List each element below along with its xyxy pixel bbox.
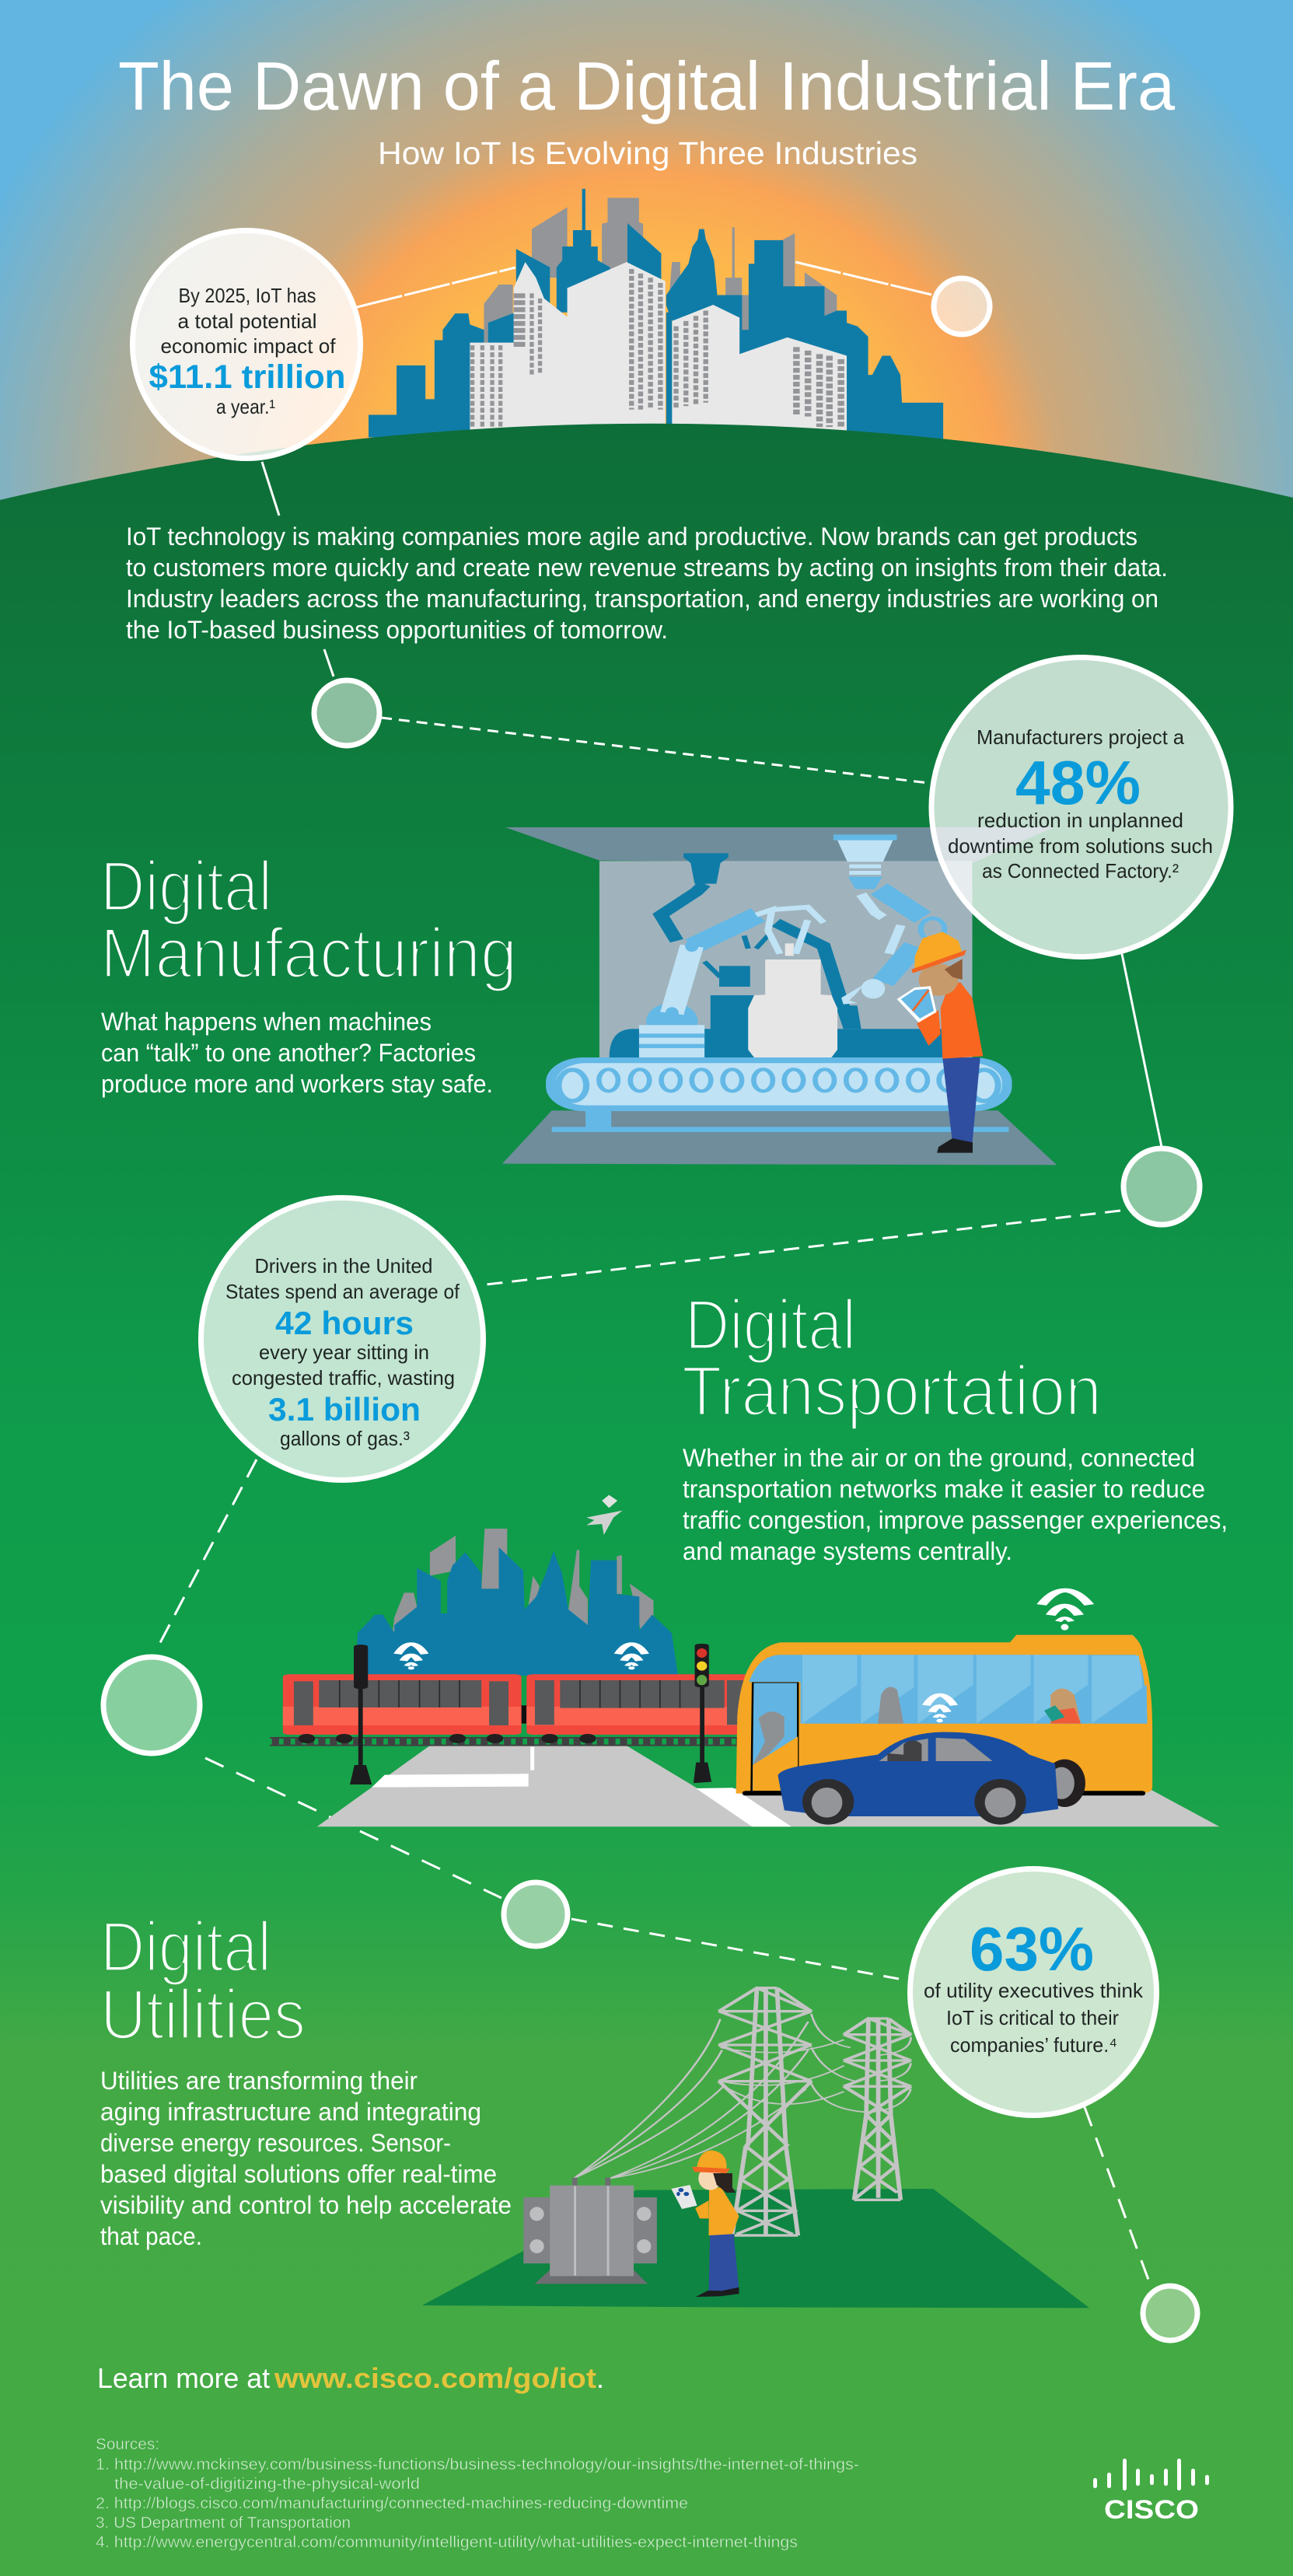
callout: 63 percent: of utility executives think <box>924 1979 1144 2002</box>
sources: 4. http://www.energycentral.com/community/intelligent-utility/what-utilities-expect-internet-things <box>96 2534 798 2551</box>
heading: Digital Manufacturing <box>100 848 517 993</box>
manufacturing text: What happens when machines <box>101 1008 432 1036</box>
callout: 42 hours: Drivers in the United <box>255 1254 432 1278</box>
utilities text: visibility and control to help accelerate <box>100 2191 512 2219</box>
connector node: center <box>504 1882 568 1946</box>
callout: 11.1 trillion <box>132 230 361 459</box>
callout: 63 percent: 63% <box>970 1914 1094 1984</box>
callout: 42 hours: States spend an average of <box>225 1280 460 1303</box>
callout: 42 hours: every year sitting in <box>259 1340 429 1364</box>
sources <box>96 2436 859 2551</box>
callout: 11.1 trillion: By 2025, IoT has <box>179 284 316 307</box>
heading: Digital Manufacturing: Digital <box>100 848 272 926</box>
heading: Digital Utilities: Utilities <box>100 1976 306 2054</box>
sources: 3. US Department of Transportation <box>96 2515 351 2532</box>
callout: 11.1 trillion: a year.¹ <box>216 395 275 418</box>
utilities text <box>100 2067 512 2250</box>
intro text <box>126 523 1168 644</box>
intro text: IoT technology is making companies more agile and productive. Now brands can get products <box>126 523 1137 551</box>
intro text: to customers more quickly and create new revenue streams by acting on insights from their data. <box>126 554 1168 582</box>
sources: the-value-of-digitizing-the-physical-world <box>114 2476 420 2493</box>
transportation text: traffic congestion, improve passenger experiences, <box>683 1506 1228 1534</box>
intro text: Industry leaders across the manufacturing, transportation, and energy industries are working on <box>126 585 1158 613</box>
heading: Digital Utilities <box>100 1908 306 2054</box>
callout: 48 percent: downtime from solutions such <box>948 834 1213 858</box>
connector node: left <box>314 680 379 746</box>
heading: Digital Utilities: Digital <box>100 1908 271 1987</box>
callout: 48 percent: Manufacturers project a <box>977 725 1185 749</box>
utilities text: that pace. <box>100 2222 202 2250</box>
heading: Digital Manufacturing: Manufacturing <box>100 914 517 993</box>
callout: 63 percent <box>910 1869 1157 2115</box>
call to action: www.cisco.com/go/iot <box>274 2362 596 2394</box>
callout: 63 percent: IoT is critical to their <box>946 2006 1119 2029</box>
callout: 42 hours: gallons of gas.³ <box>280 1427 410 1450</box>
callout: 42 hours: congested traffic, wasting <box>232 1366 455 1389</box>
subtitle: How IoT Is Evolving Three Industries <box>378 135 917 171</box>
logo: Cisco: CISCO <box>1104 2495 1199 2525</box>
illustration: city skyline <box>369 189 943 441</box>
transportation text: and manage systems centrally. <box>683 1537 1012 1565</box>
connector node: right <box>1124 1148 1200 1225</box>
callout: 42 hours: 3.1 billion <box>268 1391 421 1428</box>
illustration: power grid <box>422 1988 1089 2308</box>
utilities text: Utilities are transforming their <box>100 2067 418 2095</box>
connector node: bottom right <box>1143 2286 1197 2340</box>
call to action: Learn more at <box>97 2362 270 2394</box>
utilities text: aging infrastructure and integrating <box>100 2098 481 2126</box>
callout: 48 percent <box>931 658 1231 956</box>
connector: top circle to small circle <box>357 262 931 307</box>
callout: 42 hours <box>201 1197 484 1480</box>
utilities text: based digital solutions offer real-time <box>100 2160 497 2188</box>
title: The Dawn of a Digital Industrial Era <box>118 47 1175 124</box>
callout: 48 percent: 48% <box>1015 748 1141 817</box>
sky background with sunrise glow <box>0 0 1293 544</box>
callout: 11.1 trillion: $11.1 trillion <box>149 358 345 396</box>
callout: 42 hours: 42 hours <box>275 1305 414 1341</box>
transportation text: Whether in the air or on the ground, connected <box>683 1444 1195 1472</box>
heading: Digital Transportation: Transportation <box>682 1352 1102 1431</box>
sources: 1. http://www.mckinsey.com/business-functions/business-technology/our-insights/the-internet-of-things- <box>96 2456 859 2473</box>
intro text: the IoT-based business opportunities of tomorrow. <box>126 616 668 644</box>
transportation text <box>683 1444 1228 1565</box>
heading: Digital Transportation: Digital <box>685 1286 856 1365</box>
transportation text: transportation networks make it easier to reduce <box>683 1475 1205 1503</box>
callout: 48 percent: reduction in unplanned <box>977 809 1183 832</box>
manufacturing text <box>101 1008 493 1098</box>
logo: Cisco <box>1093 2459 1209 2525</box>
utilities text: diverse energy resources. Sensor- <box>100 2129 451 2157</box>
manufacturing text: produce more and workers stay safe. <box>101 1070 493 1098</box>
sources: Sources: <box>96 2436 159 2453</box>
illustration: factory <box>502 827 1057 1165</box>
illustration: transport scene <box>270 1495 1219 1826</box>
connectors <box>156 462 1162 2292</box>
callout: 11.1 trillion: economic impact of <box>160 334 336 358</box>
callout: 48 percent: as Connected Factory.² <box>982 859 1179 883</box>
callout: 63 percent: companies’ future.⁴ <box>950 2033 1117 2057</box>
heading: Digital Transportation <box>682 1286 1102 1431</box>
manufacturing text: can “talk” to one another? Factories <box>101 1039 476 1067</box>
sources: 2. http://blogs.cisco.com/manufacturing/connected-machines-reducing-downtime <box>96 2495 688 2512</box>
callout: 11.1 trillion: a total potential <box>177 309 317 333</box>
connector node: lower left <box>103 1657 200 1753</box>
connector node: top right <box>934 278 990 334</box>
call to action: . <box>596 2362 604 2394</box>
